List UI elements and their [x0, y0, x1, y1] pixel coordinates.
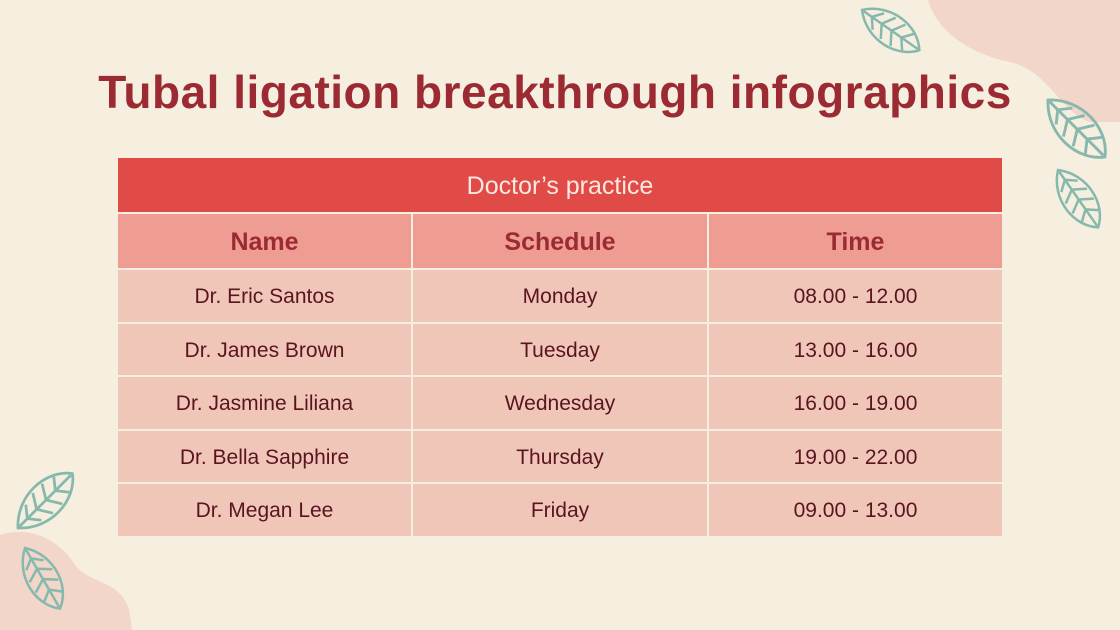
row 4: Dr. Bella Sapphire	[180, 446, 349, 469]
row 1: 08.00 - 12.00	[794, 285, 917, 308]
row 1: Dr. Eric Santos	[194, 285, 335, 308]
row 5	[118, 484, 1002, 536]
row 4: 19.00 - 22.00	[794, 446, 917, 469]
row 1	[118, 270, 1002, 322]
row 2	[118, 324, 1002, 375]
icon: leaf bottom-left 2	[11, 540, 74, 617]
row 2: Tuesday	[520, 339, 600, 362]
row 5: Friday	[531, 499, 589, 522]
table header	[118, 158, 1002, 212]
table header: Doctor’s practice	[467, 172, 653, 200]
row 5: 09.00 - 13.00	[794, 499, 917, 522]
column headers	[118, 214, 1002, 268]
icon: leaf right 2	[1045, 161, 1111, 236]
row 4	[118, 431, 1002, 482]
table: doctor's practice	[118, 158, 1002, 536]
row 3: Wednesday	[505, 392, 615, 415]
icon: leaf right 1	[1035, 87, 1118, 170]
row 5: Dr. Megan Lee	[196, 499, 333, 522]
row 4: Thursday	[516, 446, 604, 469]
column headers: Schedule	[504, 228, 616, 256]
icon: leaf top	[853, 0, 928, 63]
column headers: Time	[827, 228, 884, 256]
row 3: Dr. Jasmine Liliana	[176, 392, 353, 415]
row 3: 16.00 - 19.00	[794, 392, 917, 415]
icon: leaf bottom-left 1	[6, 461, 85, 540]
title: Tubal ligation breakthrough infographics	[98, 66, 1012, 118]
row 2: 13.00 - 16.00	[794, 339, 917, 362]
row 1: Monday	[523, 285, 597, 308]
column headers: Name	[230, 228, 299, 256]
row 2: Dr. James Brown	[185, 339, 344, 362]
row 3	[118, 377, 1002, 429]
